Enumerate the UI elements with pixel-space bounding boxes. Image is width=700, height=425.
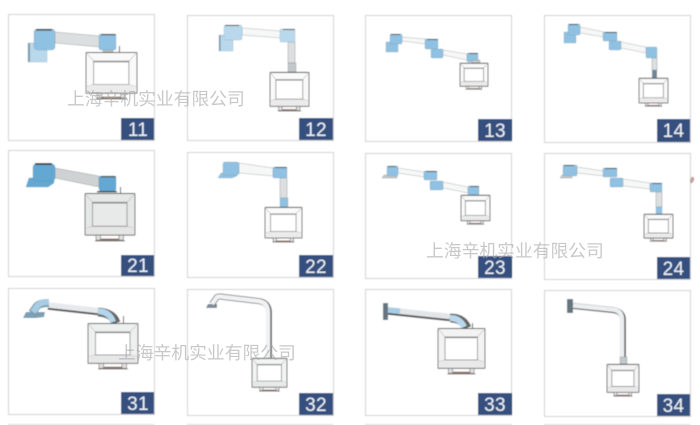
badge: 31 xyxy=(121,392,154,415)
icon: monitor model 12 xyxy=(270,72,309,111)
watermark: top left: 上海辛机实业有限公司 xyxy=(67,89,245,109)
watermark: bottom centre: 上海辛机实业有限公司 xyxy=(118,343,296,363)
panel: model 14 xyxy=(544,16,690,142)
panel: model 33 xyxy=(366,290,512,416)
icon: arm model 12 xyxy=(219,25,296,72)
badge: 33: 33 xyxy=(484,395,506,416)
next row edges at the bottom of the scan xyxy=(8,424,690,425)
badge: 24: 24 xyxy=(663,259,684,280)
badge: 13: 13 xyxy=(484,121,506,142)
badge: 23: 23 xyxy=(484,258,506,279)
badge: 34: 34 xyxy=(663,396,684,417)
icon: arm model 24 xyxy=(560,165,662,214)
icon: arm model 23 xyxy=(382,166,479,195)
panel: model 31 xyxy=(8,288,154,415)
badge: 31: 31 xyxy=(127,394,149,415)
icon: arm model 21 xyxy=(26,163,121,193)
panel: model 11 xyxy=(8,14,154,141)
icon: monitor model 31 xyxy=(88,323,138,369)
icon: monitor model 14 xyxy=(639,78,668,107)
icon: arm model 32 xyxy=(206,296,269,358)
stray mark: reddish speck xyxy=(689,177,695,183)
badge: 33 xyxy=(478,393,512,416)
panel: model 13 xyxy=(366,16,512,142)
badge: 22 xyxy=(299,255,333,278)
badge: 21 xyxy=(121,255,154,277)
icon: arm model 11 xyxy=(28,29,120,62)
icon: monitor model 11 xyxy=(86,52,137,99)
icon: monitor model 33 xyxy=(438,328,485,374)
badge: 21: 21 xyxy=(127,256,149,277)
icon: arm model 13 xyxy=(386,34,480,63)
panel: model 24 xyxy=(544,154,690,280)
badge: 32 xyxy=(299,393,333,416)
badge: 23 xyxy=(478,256,512,279)
icon: monitor model 22 xyxy=(265,207,302,242)
icon: arm model 33 xyxy=(383,303,473,329)
badge: 13 xyxy=(478,119,512,142)
icon: monitor model 13 xyxy=(460,63,488,90)
icon: monitor model 32 xyxy=(252,358,287,392)
badge: 14: 14 xyxy=(663,121,684,142)
icon: arm model 22 xyxy=(218,162,288,207)
panel: model 34 xyxy=(544,290,690,417)
icon: arm model 14 xyxy=(564,24,657,78)
icon: monitor model 23 xyxy=(461,195,490,225)
icon: monitor model 34 xyxy=(607,364,639,397)
icon: arm model 31 xyxy=(23,302,124,323)
icon: monitor model 21 xyxy=(85,193,135,241)
badge: 12: 12 xyxy=(305,120,327,141)
badge: 32: 32 xyxy=(305,395,327,416)
panel: model 12 xyxy=(188,16,334,141)
badge: 24 xyxy=(657,257,690,280)
badge: 11: 11 xyxy=(128,120,148,141)
badge: 12 xyxy=(299,118,333,141)
icon: arm model 34 xyxy=(567,299,627,364)
badge: 11 xyxy=(121,118,154,141)
panel: model 22 xyxy=(188,152,334,278)
panel: model 23 xyxy=(366,154,512,279)
icon: monitor model 24 xyxy=(644,214,673,242)
watermark: middle right: 上海辛机实业有限公司 xyxy=(426,241,604,261)
panel: model 21 xyxy=(8,150,154,277)
panel: model 32 xyxy=(188,290,334,416)
badge: 14 xyxy=(657,119,690,142)
badge: 34 xyxy=(657,394,690,417)
badge: 22: 22 xyxy=(305,257,327,278)
